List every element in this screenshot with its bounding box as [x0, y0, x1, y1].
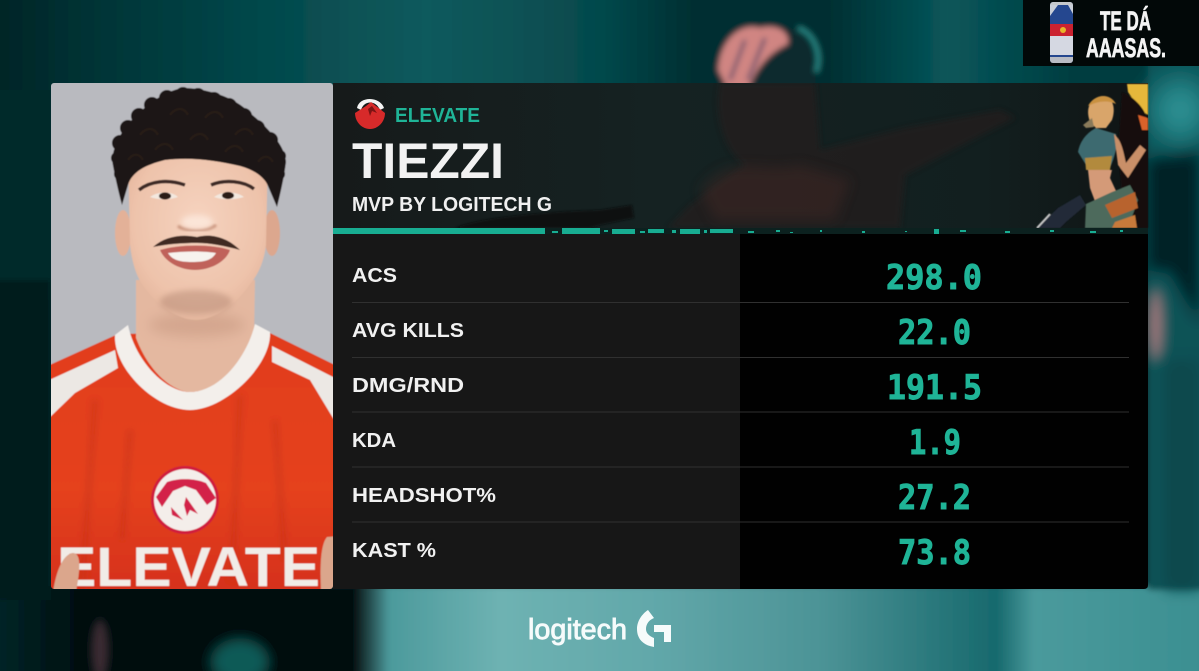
- icon: energy drink can: [1050, 2, 1073, 63]
- row: KAST %: 73.8: [898, 533, 971, 573]
- row: AVG KILLS: AVG KILLS: [352, 319, 464, 342]
- row: KDA: [352, 423, 961, 463]
- player name: TIEZZI: [352, 133, 504, 189]
- row: DMG/RND: 191.5: [887, 368, 982, 408]
- sponsor: Red Bull banner: [1023, 0, 1199, 66]
- moustache: [153, 236, 240, 250]
- row: AVG KILLS: [352, 313, 971, 353]
- hair: [111, 87, 286, 207]
- row: ACS: 298.0: [886, 258, 982, 298]
- row: DMG/RND: [352, 368, 982, 408]
- sponsor: Logitech G logo: logitech: [528, 614, 627, 646]
- face: [128, 150, 268, 320]
- ears: [115, 210, 131, 256]
- award subtitle: MVP BY LOGITECH G: [352, 194, 552, 216]
- accent strip: torn teal bar: [333, 228, 1148, 234]
- eyes: [150, 192, 244, 200]
- panel: header: [333, 83, 1148, 229]
- blurred agent silhouette: [455, 83, 1015, 228]
- nose: [178, 225, 216, 230]
- row: HEADSHOT%: HEADSHOT%: [352, 484, 496, 507]
- slogan: TE DÁ: [1100, 5, 1151, 36]
- panel: player photo: [45, 78, 339, 598]
- jersey wordmark: ELEVATE: [57, 535, 320, 598]
- icon: Logitech G mark: [637, 610, 671, 647]
- row: KAST %: KAST %: [352, 539, 436, 562]
- row: DMG/RND: DMG/RND: [352, 374, 464, 397]
- team logo: [355, 99, 385, 129]
- row: AVG KILLS: 22.0: [898, 313, 971, 353]
- agent illustration: [1037, 84, 1148, 228]
- row: ACS: ACS: [352, 264, 397, 287]
- mouth: [160, 246, 230, 270]
- team name: ELEVATE: [395, 105, 480, 127]
- brows: [139, 182, 254, 190]
- sponsor: Logitech G logo: [528, 610, 671, 647]
- row: HEADSHOT%: 27.2: [898, 478, 971, 518]
- panel: stats table: [333, 234, 1148, 589]
- row: KAST %: [352, 533, 971, 573]
- row: ACS: [352, 258, 982, 298]
- row: KDA: KDA: [352, 429, 396, 452]
- hands: [53, 553, 79, 592]
- row: HEADSHOT%: [352, 478, 971, 518]
- row: KDA: 1.9: [909, 423, 961, 463]
- collar: [115, 324, 270, 410]
- jersey: [45, 332, 339, 594]
- neck: [136, 280, 255, 392]
- jersey logo: [151, 466, 219, 534]
